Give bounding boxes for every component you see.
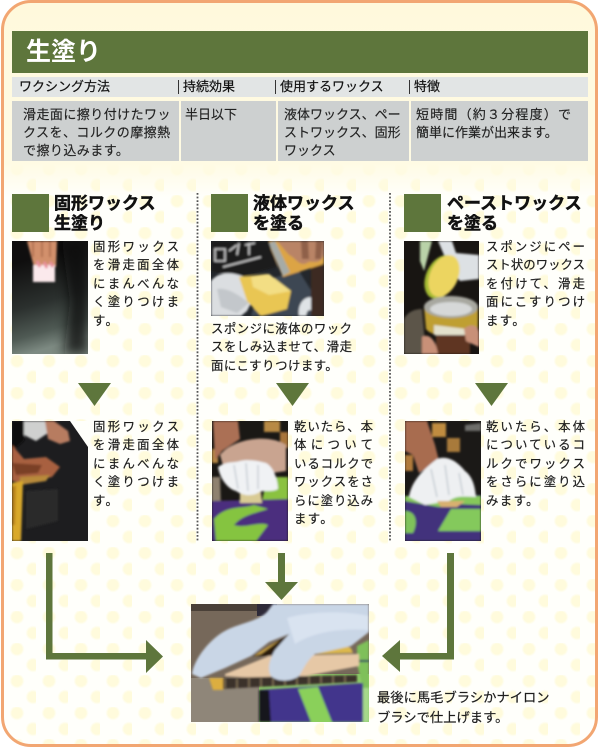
- text: paste wax step 2: をさらに塗り込: [486, 475, 585, 489]
- header: features: [409, 80, 450, 94]
- text: liquid wax step 2: 体について: [294, 438, 373, 452]
- heading text: 固形ワックス: [54, 194, 156, 213]
- text: paste wax step 1: を付けて、滑走: [486, 277, 585, 291]
- text: paste wax step 1: [486, 240, 585, 328]
- text: liquid wax step 2: いるコルクで: [294, 457, 373, 471]
- table header row: [12, 77, 588, 97]
- text: final finishing step: ブラシで仕上げます。: [377, 710, 508, 725]
- heading text: ペーストワックス: [447, 194, 582, 213]
- header: method: ワクシング方法: [19, 79, 110, 94]
- cell: wax used: ストワックス、固形: [284, 125, 401, 140]
- cell: features: [411, 101, 588, 161]
- heading text: を塗る: [447, 214, 498, 233]
- header: duration: 持続効果: [183, 79, 235, 94]
- text: final finishing step: [377, 690, 550, 725]
- cell: method: クスを、コルクの摩擦熱: [23, 125, 171, 140]
- photo: finishing with brush: [191, 604, 369, 722]
- heading text: を塗る: [253, 214, 304, 233]
- text: paste wax step 2: についているコ: [486, 438, 585, 452]
- text: liquid wax step 1: スをしみ込ませて、滑走: [211, 340, 352, 354]
- heading: title text: 生塗り: [26, 38, 101, 66]
- heading: liquid wax: [211, 194, 354, 233]
- cell: features: 短時間（約３分程度）で: [416, 107, 572, 122]
- heading text: 生塗り: [54, 214, 105, 233]
- text: paste wax step 2: [486, 420, 585, 508]
- text: solid wax step 2: にまんべんな: [93, 457, 179, 471]
- photo: solid wax rubbing with cork: [12, 421, 88, 541]
- text: liquid wax step 2: らに塗り込み: [294, 494, 373, 508]
- text: solid wax step 1: す。: [93, 314, 119, 328]
- photo: solid wax application: [12, 241, 88, 354]
- heading text: [253, 194, 354, 233]
- photo: liquid wax rubbing with cork: [212, 421, 288, 541]
- cell: wax used: [278, 101, 409, 161]
- text: solid wax step 1: にまんべんな: [93, 277, 179, 291]
- arrow: left elbow to final: [46, 553, 163, 673]
- text: solid wax step 2: す。: [93, 494, 119, 508]
- text: liquid wax step 2: [294, 420, 373, 526]
- text: solid wax step 2: [93, 420, 179, 508]
- text: paste wax step 1: スト状のワックス: [486, 258, 585, 272]
- arrow: down liquid: [276, 383, 309, 406]
- text: paste wax step 1: 面にこすりつけ: [486, 295, 585, 309]
- text: solid wax step 1: を滑走面全体: [93, 258, 179, 272]
- arrow: right elbow to final: [382, 553, 454, 672]
- cell: duration: [181, 101, 276, 161]
- text: liquid wax step 1: [211, 322, 352, 373]
- cell: method: で擦り込みます。: [23, 143, 129, 158]
- text: solid wax step 1: く塗りつけま: [93, 295, 179, 309]
- text: solid wax step 2: く塗りつけま: [93, 475, 179, 489]
- text: solid wax step 2: 固形ワックス: [93, 420, 179, 434]
- cell: wax used: ワックス: [284, 143, 336, 158]
- cell: duration: 半日以下: [185, 107, 237, 122]
- cell: method: [12, 101, 179, 161]
- text: solid wax step 1: 固形ワックス: [93, 240, 179, 254]
- heading text: [447, 194, 582, 233]
- photo: liquid wax on sponge: [211, 241, 324, 316]
- heading marker: [211, 194, 248, 232]
- heading: solid wax: [12, 194, 156, 233]
- text: paste wax step 2: みます。: [486, 494, 540, 508]
- text: solid wax step 2: を滑走面全体: [93, 438, 179, 452]
- text: liquid wax step 1: 面にこすりつけます。: [211, 359, 338, 373]
- text: final finishing step: 最後に馬毛ブラシかナイロン: [377, 690, 550, 705]
- text: liquid wax step 1: スポンジに液体のワック: [211, 322, 352, 336]
- cell: method: 滑走面に擦り付けたワッ: [23, 107, 171, 122]
- table body row: [12, 101, 588, 161]
- text: paste wax step 2: ルクでワックス: [486, 457, 585, 471]
- text: liquid wax step 2: ワックスをさ: [294, 475, 373, 489]
- photo: paste wax rubbing with cork: [405, 421, 481, 541]
- header: wax used: 使用するワックス: [280, 79, 384, 94]
- photo: paste wax sponge and can: [404, 241, 479, 354]
- arrow: center down to final: [265, 553, 298, 600]
- heading text: 液体ワックス: [253, 194, 354, 213]
- heading text: [54, 194, 156, 233]
- heading marker: [404, 194, 441, 232]
- heading: paste wax: [404, 194, 582, 233]
- title bar: [12, 31, 588, 73]
- header: features: 特徴: [414, 79, 440, 94]
- text: paste wax step 1: ます。: [486, 314, 526, 328]
- cell: wax used: 液体ワックス、ペー: [284, 107, 401, 122]
- cell: features: 簡単に作業が出来ます。: [416, 125, 558, 140]
- heading marker: [12, 194, 49, 232]
- text: paste wax step 2: 乾いたら、本体: [486, 420, 585, 434]
- arrow: down paste: [475, 383, 508, 406]
- text: solid wax step 1: [93, 240, 179, 328]
- text: paste wax step 1: スポンジにペー: [486, 240, 585, 254]
- text: liquid wax step 2: 乾いたら、本: [294, 420, 373, 434]
- text: liquid wax step 2: ます。: [294, 512, 334, 526]
- arrow: down solid: [78, 383, 111, 406]
